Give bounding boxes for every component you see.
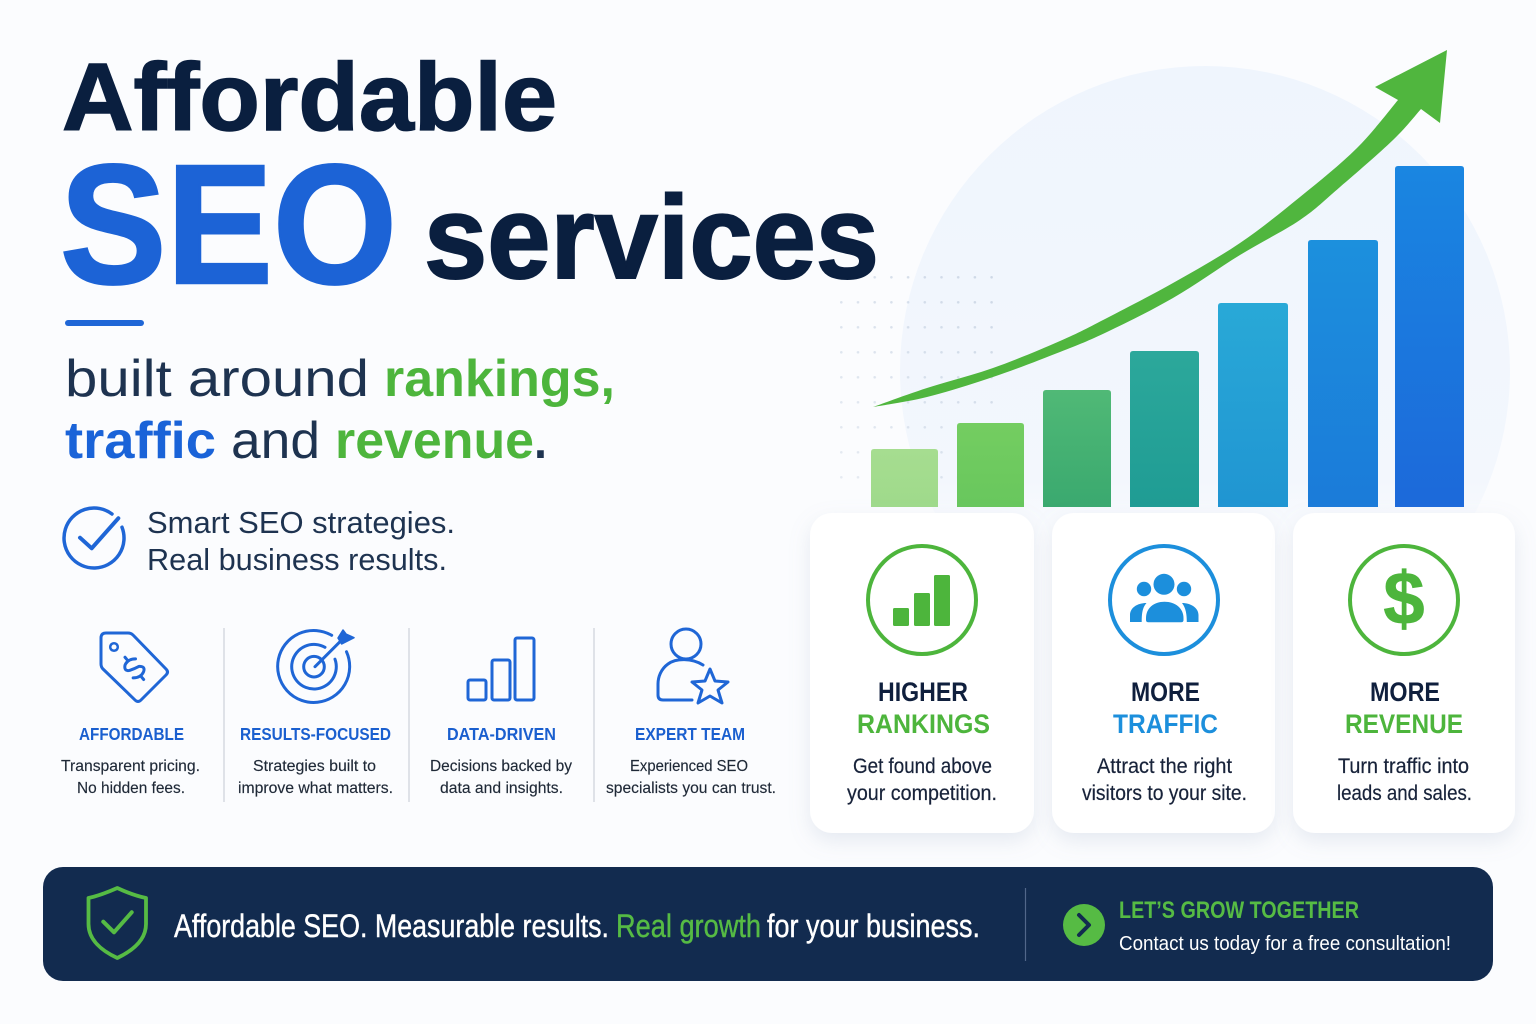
background circle bbox=[900, 66, 1510, 676]
icon: people bbox=[1110, 546, 1218, 654]
card description line 1: Turn traffic into bbox=[1338, 755, 1469, 778]
description line 2: data and insights. bbox=[440, 780, 563, 797]
card description line 2: your competition. bbox=[847, 782, 997, 805]
feature: results-focused bbox=[238, 630, 393, 797]
bar 3 bbox=[1043, 390, 1111, 507]
card title: MORE bbox=[1370, 677, 1440, 707]
icon: price tag bbox=[101, 633, 168, 702]
card panel bbox=[1293, 513, 1515, 833]
tagline line 2: Real business results. bbox=[147, 542, 447, 577]
card panel bbox=[1052, 513, 1275, 833]
subtitle part: and bbox=[231, 412, 320, 470]
bar chart bbox=[871, 166, 1464, 507]
description line 2: improve what matters. bbox=[238, 780, 393, 797]
icon: dollar bbox=[1350, 546, 1458, 654]
tagline bbox=[147, 505, 455, 577]
subtitle highlight: revenue: revenue bbox=[335, 412, 534, 470]
subtitle highlight: rankings: rankings, bbox=[384, 350, 615, 408]
message start: Affordable SEO. Measurable results. bbox=[174, 908, 609, 944]
card description line 1: Get found above bbox=[853, 755, 992, 778]
subtitle bbox=[65, 350, 615, 470]
bar 6 bbox=[1308, 240, 1378, 507]
tagline line 1: Smart SEO strategies. bbox=[147, 505, 455, 540]
card panel bbox=[810, 513, 1034, 833]
description line 1: Transparent pricing. bbox=[61, 758, 200, 775]
description line 1: Decisions backed by bbox=[430, 758, 572, 775]
subtitle highlight: traffic: traffic bbox=[65, 412, 216, 470]
description line 1: Strategies built to bbox=[253, 758, 376, 775]
card: higher rankings bbox=[810, 513, 1034, 833]
feature: affordable bbox=[61, 633, 200, 797]
description line 2: specialists you can trust. bbox=[606, 780, 776, 797]
dot pattern bbox=[838, 274, 993, 490]
bar 1 bbox=[871, 449, 938, 507]
feature: data-driven bbox=[430, 638, 572, 797]
card title: HIGHER bbox=[878, 677, 968, 707]
title bbox=[60, 44, 879, 320]
card description line 2: visitors to your site. bbox=[1082, 782, 1247, 805]
growth arrow bbox=[873, 50, 1447, 407]
call to action heading: LET’S GROW TOGETHER bbox=[1119, 897, 1359, 924]
icon: check circle bbox=[64, 508, 124, 568]
icon: person with star bbox=[658, 629, 728, 703]
message highlight: Real growth bbox=[616, 908, 761, 944]
banner panel bbox=[43, 867, 1493, 981]
heading: AFFORDABLE bbox=[79, 724, 184, 744]
bar 4 bbox=[1130, 351, 1199, 507]
card title highlight: RANKINGS bbox=[857, 709, 990, 739]
bar 5 bbox=[1218, 303, 1288, 507]
accent line bbox=[65, 320, 144, 326]
title word: SEO: SEO bbox=[60, 130, 397, 320]
title line: Affordable: Affordable bbox=[62, 44, 557, 151]
description line 2: No hidden fees. bbox=[77, 780, 185, 797]
bar 2 bbox=[957, 423, 1024, 507]
heading: DATA-DRIVEN bbox=[447, 724, 556, 744]
heading: RESULTS-FOCUSED bbox=[240, 724, 391, 744]
card title: MORE bbox=[1131, 677, 1200, 707]
bottom banner bbox=[43, 867, 1493, 981]
heading: EXPERT TEAM bbox=[635, 724, 745, 744]
message end: for your business. bbox=[767, 908, 980, 944]
card description line 2: leads and sales. bbox=[1337, 782, 1472, 805]
card title highlight: TRAFFIC bbox=[1113, 709, 1218, 739]
card: more revenue bbox=[1293, 513, 1515, 833]
icon: target bbox=[278, 630, 354, 702]
title word: services: services bbox=[424, 172, 879, 304]
description line 1: Experienced SEO bbox=[630, 758, 748, 775]
card description line 1: Attract the right bbox=[1097, 755, 1232, 778]
card: more traffic bbox=[1052, 513, 1275, 833]
banner message bbox=[174, 908, 980, 944]
icon: rankings bars bbox=[868, 546, 976, 654]
subtitle period: . bbox=[534, 412, 547, 470]
feature: expert team bbox=[606, 629, 776, 797]
icon: shield check bbox=[88, 888, 146, 958]
icon: dollar: $ bbox=[1383, 557, 1425, 640]
icon: bar chart outline bbox=[468, 638, 534, 700]
icon: chevron button bbox=[1063, 904, 1105, 946]
bar 7 bbox=[1395, 166, 1464, 507]
card title highlight: REVENUE bbox=[1345, 709, 1463, 739]
call to action text: Contact us today for a free consultation! bbox=[1119, 933, 1451, 955]
subtitle part: built around bbox=[65, 350, 369, 408]
